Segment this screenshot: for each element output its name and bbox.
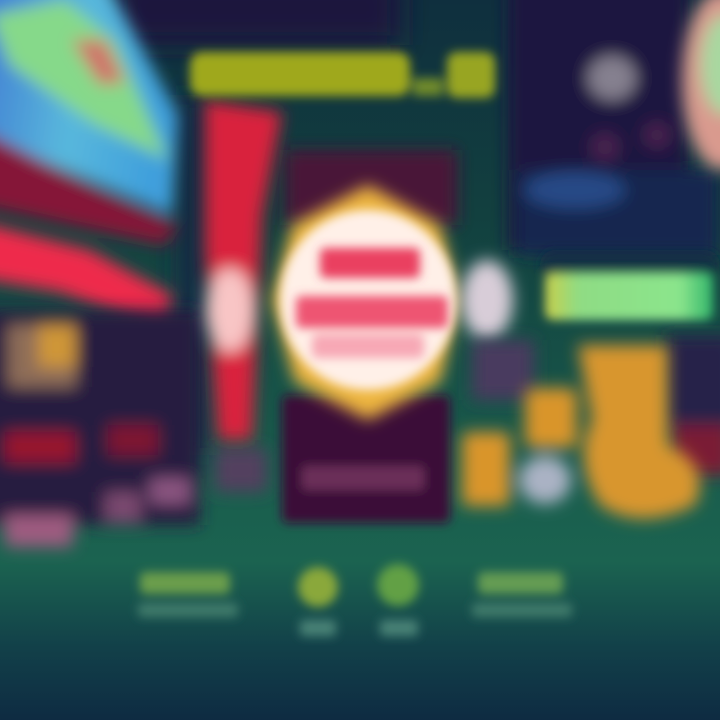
stat: right	[472, 572, 572, 617]
right white glow	[461, 260, 513, 340]
panel: maroon backdrop	[285, 150, 457, 225]
stat: left	[138, 572, 238, 617]
badge gold border	[272, 185, 460, 420]
badge pink inner	[296, 248, 448, 358]
panel: poster lower	[282, 395, 450, 523]
panel: left storefronts	[0, 310, 267, 547]
panel: dark building right	[508, 0, 718, 255]
panel: right shop	[472, 335, 720, 475]
green bar	[540, 250, 720, 320]
panel: dark building top centre	[115, 0, 400, 455]
title	[190, 52, 495, 98]
panel: red vertical banner	[205, 100, 282, 440]
stat: centre right	[377, 564, 419, 636]
panel: left neon sign	[0, 0, 178, 330]
badge white disc	[280, 210, 456, 390]
panel: central badge	[272, 185, 460, 420]
stat: centre left	[298, 567, 338, 636]
icon: gold coins	[462, 345, 700, 518]
panel: right circle sign	[682, 0, 720, 170]
